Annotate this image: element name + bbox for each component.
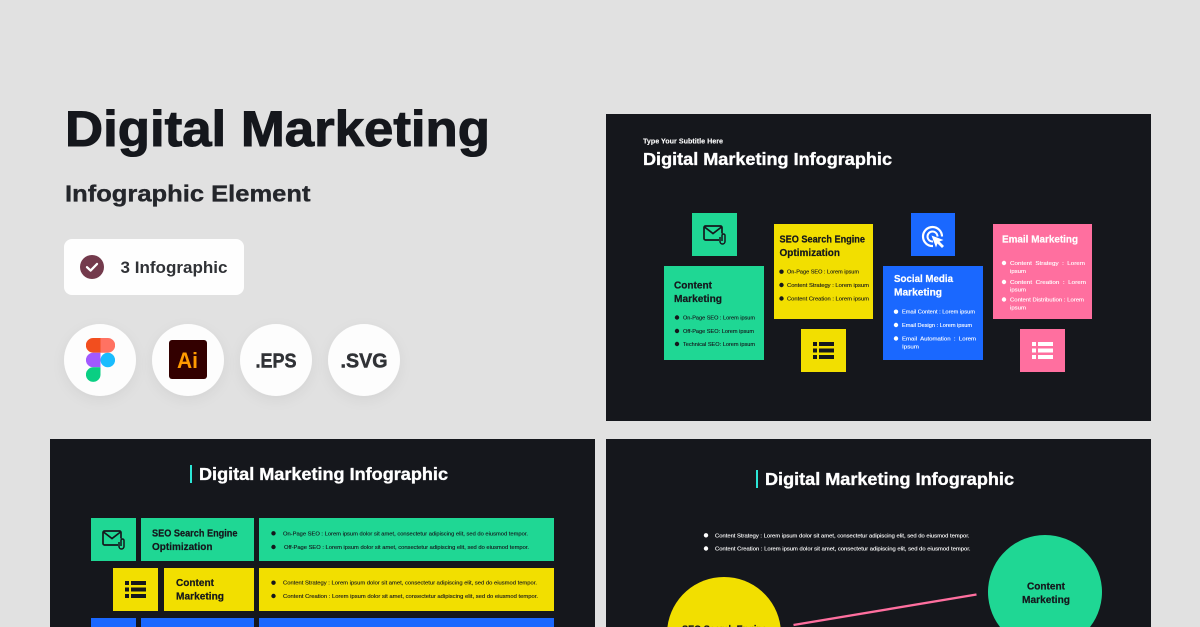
card: SEO search engine optimization [774, 224, 873, 319]
card: social media marketing: Email Automation : Lorem [902, 336, 976, 342]
icon: Adobe Illustrator: Ai [177, 348, 198, 373]
card: email marketing: ipsum [1010, 306, 1026, 312]
heading accent bar [756, 470, 758, 488]
badge: EPS [240, 324, 312, 396]
circle: content marketing: Content [1027, 582, 1066, 592]
badge label: 3 Infographic [120, 259, 228, 277]
card: email marketing: Email Marketing [1002, 234, 1078, 246]
badge: EPS: .EPS [256, 350, 296, 372]
row: SEO search engine optimization: SEO Search Engine [152, 528, 238, 540]
slide heading: Digital Marketing Infographic [765, 469, 1014, 489]
icon: Adobe Illustrator [152, 324, 224, 396]
badge: 3 Infographic [64, 239, 244, 295]
icon tile: list pink [1020, 329, 1065, 372]
connector line [794, 594, 976, 625]
card: social media marketing: Social Media [894, 274, 953, 285]
card: content marketing: Content [674, 280, 713, 292]
card: SEO search engine optimization: Optimization [780, 248, 840, 259]
circle: SEO search engine [667, 577, 781, 627]
card: content marketing [664, 266, 764, 360]
icon tile: cursor target blue [911, 213, 955, 256]
card: SEO search engine optimization: Content Strategy : Lorem ipsum [787, 283, 869, 289]
badge: SVG: .SVG [340, 350, 388, 372]
card: SEO search engine optimization: Content Creation : Lorem ipsum [787, 296, 869, 302]
row: content marketing: Content Strategy : Lorem ipsum dolor sit amet, consectetur adipiscing elit, sed do eiusmod tempor. [283, 581, 537, 587]
card: email marketing: Content Distribution : Lorem [1010, 298, 1084, 304]
row: SEO search engine optimization: On-Page SEO : Lorem ipsum dolor sit amet, consectetur adipiscing elit, sed do eiusmod tempor. [283, 531, 528, 537]
row: SEO search engine optimization: Optimization [152, 542, 212, 553]
icon tile: mail green [692, 213, 737, 256]
card: social media marketing: Ipsum [902, 344, 919, 350]
slide subtitle: Type Your Subtitle Here [643, 136, 723, 146]
circle: content marketing: Marketing [1022, 595, 1070, 606]
row: content marketing: Content Creation : Lorem ipsum dolor sit amet, consectetur adipiscing elit, sed do eiusmod tempor. [283, 594, 538, 600]
card: content marketing: On-Page SEO : Lorem ipsum [683, 316, 755, 322]
card: SEO search engine optimization: On-Page SEO : Lorem ipsum [787, 270, 859, 276]
card: email marketing: ipsum [1010, 288, 1026, 294]
heading accent bar [190, 465, 192, 483]
circle: content marketing [988, 535, 1102, 627]
badge: SVG [328, 324, 400, 396]
title: Digital Marketing [65, 101, 490, 157]
card: social media marketing: Marketing [894, 288, 942, 298]
subtitle: Infographic Element [65, 180, 311, 206]
row: SEO search engine optimization [91, 518, 554, 561]
panel: slide 2 rows [50, 439, 595, 627]
card: email marketing [993, 224, 1092, 319]
card: SEO search engine optimization: SEO Search Engine [780, 234, 865, 246]
card: social media marketing: Email Design : Lorem ipsum [902, 323, 972, 329]
bullet list: Content Creation : Lorem ipsum dolor sit amet, consectetur adipiscing elit, sed do eiusmod tempor. [715, 546, 971, 552]
row: content marketing: Marketing [176, 592, 224, 602]
card: email marketing: Content Strategy : Lorem [1010, 261, 1085, 267]
row: social media marketing [91, 618, 554, 627]
icon: check [80, 255, 104, 279]
row: content marketing [113, 568, 554, 611]
panel: slide 3 circles [606, 439, 1151, 627]
card: social media marketing: Email Content : Lorem ipsum [902, 310, 975, 316]
bullet list [704, 533, 971, 552]
row: content marketing: Content [176, 578, 215, 589]
slide heading: Digital Marketing Infographic [643, 149, 892, 169]
card: email marketing: ipsum [1010, 269, 1026, 275]
bullet list: Content Strategy : Lorem ipsum dolor sit amet, consectetur adipiscing elit, sed do eiusmod tempor. [715, 533, 970, 539]
panel: slide 1 cards [606, 114, 1151, 421]
card: social media marketing [883, 266, 983, 360]
card: email marketing: Content Creation : Lorem [1010, 280, 1086, 286]
icon tile: list yellow [801, 329, 846, 372]
card: content marketing: Marketing [674, 294, 722, 305]
card: content marketing: Off-Page SEO: Lorem ipsum [683, 329, 754, 335]
card: content marketing: Technical SEO: Lorem ipsum [683, 342, 755, 348]
row: SEO search engine optimization: Off-Page SEO : Lorem ipsum dolor sit amet, consectetur adipiscing elit, sed do eiusmod tempor. [284, 545, 529, 551]
icon: Figma [64, 324, 136, 396]
slide heading: Digital Marketing Infographic [199, 464, 448, 484]
